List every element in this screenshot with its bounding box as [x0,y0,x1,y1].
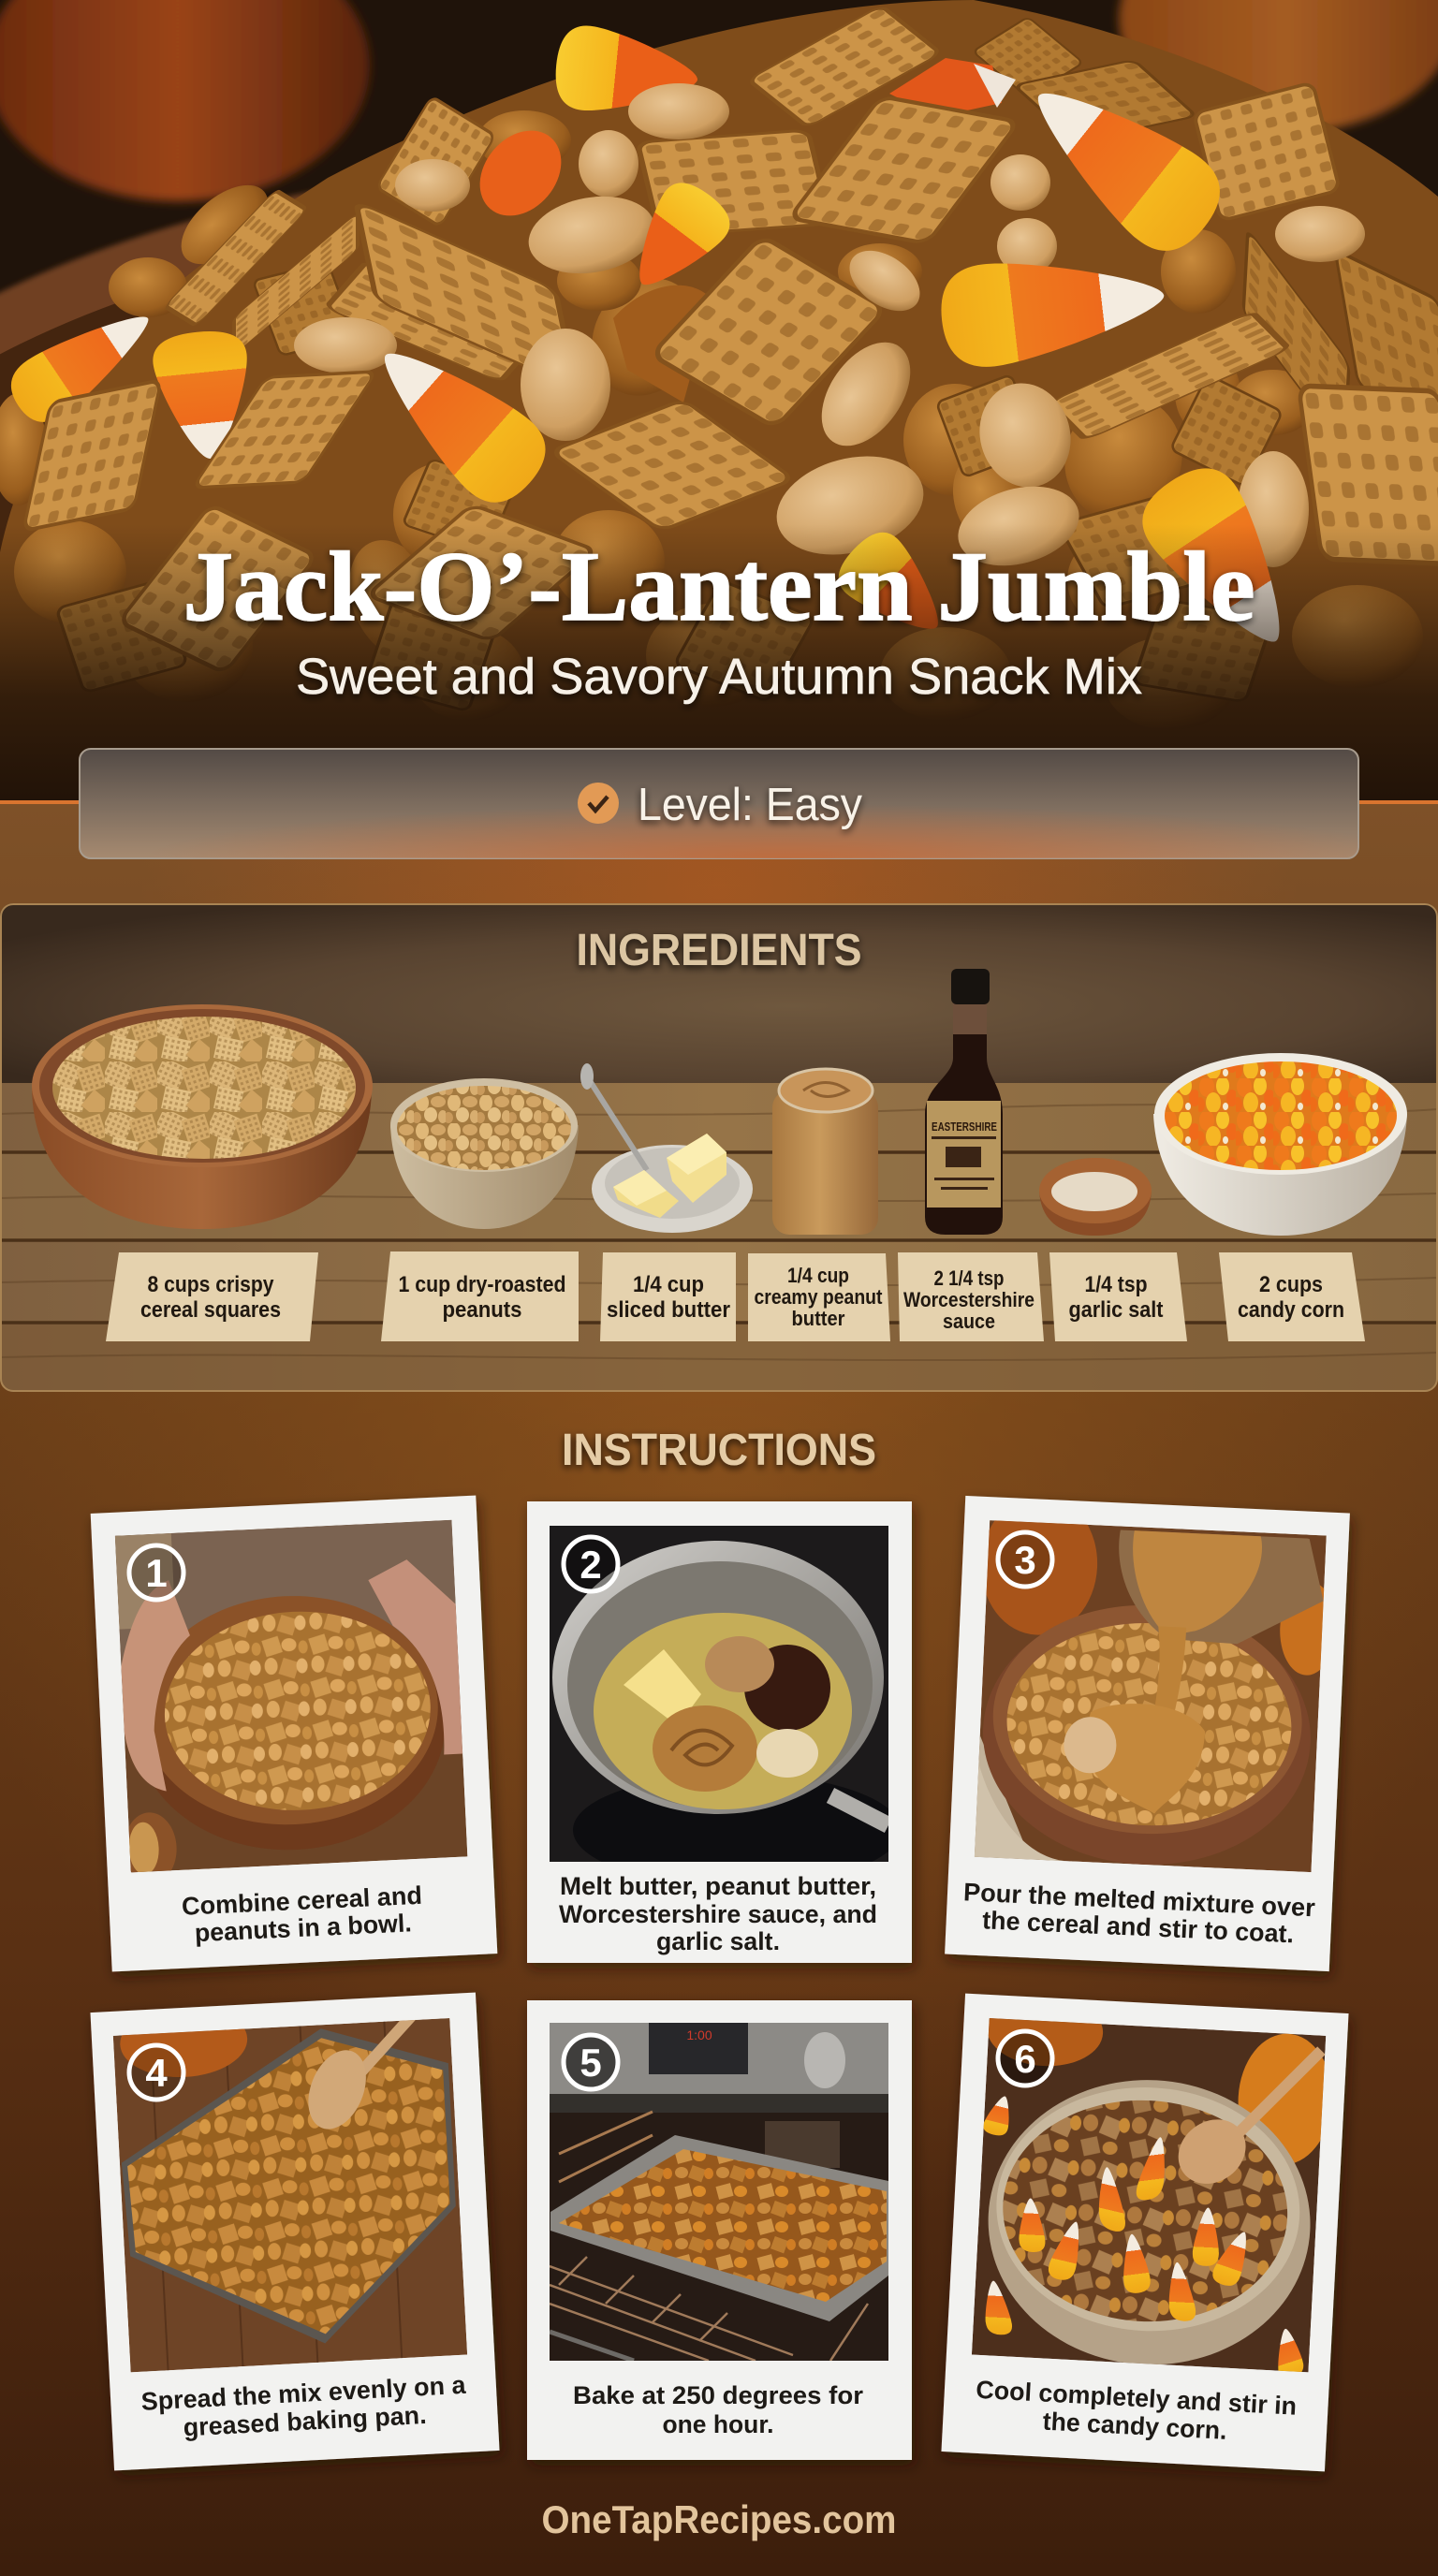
label: peanut butter: creamy peanut [755,1285,883,1309]
label: candy corn [1219,1252,1365,1341]
heading: ingredients: INGREDIENTS [577,926,861,975]
number badge 6: 6 [1014,2037,1036,2081]
ingredient labels [106,1251,1365,1341]
number badge 2: 2 [580,1543,602,1587]
step 1 card: Combine cereal and [181,1881,422,1921]
icon: small bowl of garlic salt [1039,1158,1152,1236]
icon: peanut butter jar [772,1069,878,1235]
label: garlic salt: garlic salt [1069,1297,1163,1323]
panel: ingredients [0,903,1438,1392]
number badge 5 [564,2035,618,2089]
step 2 card: garlic salt. [656,1927,780,1955]
footer website: OneTapRecipes.com [541,2497,897,2541]
step 3 card: the cereal and stir to coat. [982,1906,1295,1948]
label: peanut butter: butter [792,1307,845,1330]
label: Worcestershire: Worcestershire [903,1288,1034,1311]
level badge bar [80,749,1358,858]
label: butter: sliced butter [607,1297,730,1323]
page background [0,796,1438,2576]
number badge 1: 1 [145,1551,168,1595]
title: Jack-O’-Lantern Jumble [183,532,1255,641]
label: peanuts: 1 cup dry-roasted [399,1272,565,1297]
subtitle: Sweet and Savory Autumn Snack Mix [296,649,1142,705]
icon: bowl of peanuts [390,1078,579,1229]
hero photo: snack mix in a bowl [0,0,1438,800]
icon: bowl of candy corn [1153,1053,1407,1236]
label: cereal: 8 cups crispy [148,1272,274,1297]
label: candy corn: candy corn [1238,1297,1344,1323]
step 2 card [527,1501,912,1963]
step 5 card [527,2000,912,2460]
number badge 4 [129,2045,183,2100]
label: cereal: cereal squares [140,1297,281,1323]
number badge 5: 5 [580,2041,602,2085]
number badge 3: 3 [1014,1538,1036,1582]
label: peanuts: peanuts [442,1297,522,1323]
number badge 6 [998,2031,1052,2086]
step 6 card: Cool completely and stir in [976,2376,1298,2421]
step 2 card: Melt butter, peanut butter, [560,1872,876,1900]
label: Worcestershire [898,1252,1044,1341]
label: peanut butter [748,1253,890,1341]
step 2 card: Worcestershire sauce, and [559,1900,877,1928]
label: butter [600,1252,736,1341]
step 4 card [90,1991,500,2470]
step 5 card: one hour. [663,2410,773,2438]
step 1 card: peanuts in a bowl. [194,1909,412,1947]
label: garlic salt [1049,1252,1187,1341]
number badge 1 [129,1545,183,1600]
step 3 card: Pour the melted mixture over [962,1878,1316,1922]
number badge 3 [998,1532,1052,1587]
label: Worcestershire: sauce [943,1310,995,1333]
label: cereal [106,1252,318,1341]
icon: Worcestershire bottle [925,969,1003,1235]
step 5 card: 1:00 [686,2027,712,2042]
step 4 card: Spread the mix evenly on a [140,2371,467,2416]
step 1 card [91,1496,497,1971]
step 5 card: Bake at 250 degrees for [573,2381,863,2409]
bottle label text: EASTERSHIRE [932,1120,997,1134]
heading: instructions: INSTRUCTIONS [562,1426,876,1475]
icon: wooden bowl of cereal squares [32,1004,373,1229]
step 3 card [945,1491,1350,1971]
number badge 2 [564,1537,618,1591]
step 4 card: greased baking pan. [183,2401,427,2442]
label: peanuts [381,1251,579,1341]
label: candy corn: 2 cups [1259,1272,1323,1297]
label: peanut butter: 1/4 cup [787,1264,849,1287]
label: Worcestershire: 2 1/4 tsp [934,1266,1004,1290]
icon: plate of butter with spoon [580,1063,753,1233]
icon: check badge [578,783,619,824]
label: butter: 1/4 cup [633,1272,704,1297]
label: garlic salt: 1/4 tsp [1084,1272,1148,1297]
level text: Level: Easy [638,780,862,830]
number badge 4: 4 [145,2051,168,2095]
step 6 card [941,1991,1349,2471]
accent line [0,800,1438,804]
step 6 card: the candy corn. [1042,2408,1227,2445]
